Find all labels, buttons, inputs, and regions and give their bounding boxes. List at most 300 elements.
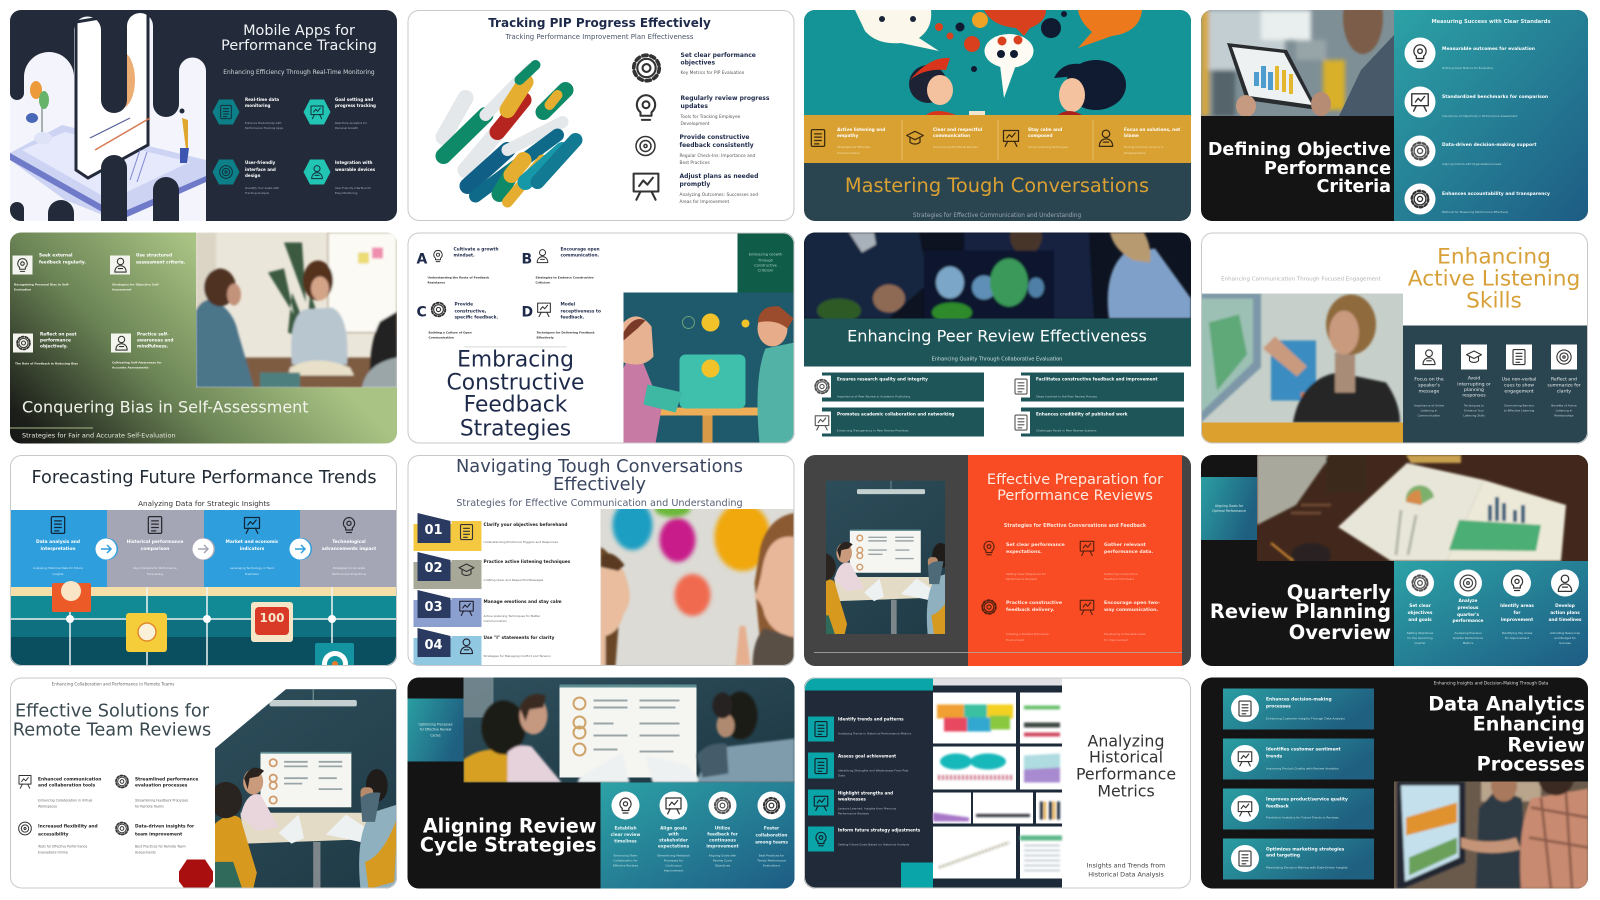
item 02: Practice active listening techniques [484, 559, 571, 565]
item: establish timelines: Effective Reviews [613, 864, 639, 868]
subtitle: Enhancing Efficiency Through Real-Time Monitoring [223, 70, 375, 76]
title: Remote Team Reviews [13, 720, 211, 740]
item: standardized benchmarks: Importance of Objectivity in Performance Assessment [1442, 114, 1518, 118]
green corner box [738, 232, 794, 292]
item: utilize feedback: improvement [706, 844, 739, 850]
title: Effective Solutions for [15, 702, 210, 722]
illustration: diagonal capsule stripes [444, 65, 576, 202]
dark left panel [804, 678, 933, 888]
item: integration with wearable devices [304, 160, 376, 195]
item: research quality: Ensures research quality and integrity [837, 376, 928, 382]
slide: Mastering Tough Conversations [804, 10, 1191, 221]
photo: team around a world map monitor [804, 218, 1191, 322]
item C [416, 302, 498, 340]
item: highlight strengths [808, 790, 897, 816]
item B: B [522, 252, 532, 268]
item: data-driven decision-making [1404, 136, 1537, 166]
item: product quality: feedback [1266, 804, 1289, 810]
slide: Data Analytics Enhancing Review Processes [1201, 678, 1588, 888]
title: Embracing [457, 348, 574, 372]
item: practice constructive feedback delivery: Creating a Positive Discussion [1006, 632, 1050, 636]
item: develop action plans: and timelines [1549, 617, 1582, 623]
item: identify areas for improvement [1500, 570, 1534, 640]
item: integration with wearable devices: Easy Monitoring [335, 191, 358, 195]
item: adjust plans as needed promptly [634, 173, 758, 205]
item: stay calm and composed: Stay calm and [1028, 127, 1062, 133]
item: user-friendly interface and design: Quantify Your Goals with [245, 186, 280, 190]
item: analyze previous performance: performance [1453, 618, 1484, 624]
subtitle: Strategies for Effective Conversations and Feedback [1004, 523, 1147, 529]
item: real-time data monitoring: Real-time data [245, 97, 279, 102]
item: stay calm and composed: composed [1028, 133, 1053, 139]
item: enhanced communication: Workspaces [38, 804, 57, 808]
photo: meeting room in angled frame [179, 689, 470, 889]
item: analyze previous performance [1453, 570, 1484, 645]
item 01: Understanding Emotional Triggers and Responses [484, 540, 558, 544]
item: academic collaboration [813, 408, 984, 436]
item: focus on solutions, not blame: Focus on solutions, not [1124, 127, 1180, 133]
teal panel [600, 782, 794, 888]
item: clear and respectful communication [902, 120, 983, 160]
step: technological advancements: Performance Projections [332, 572, 366, 576]
item: provide constructive feedback consistently: Best Practices [680, 160, 711, 166]
item C: constructive, [454, 308, 487, 314]
step: data analysis: Data analysis and [36, 539, 80, 545]
item: regularly review progress updates: Tools for Tracking Employee [680, 114, 741, 120]
photo: meeting around a screen [464, 678, 794, 782]
item: streamlined performance [116, 776, 198, 808]
title: Data Analytics [1428, 692, 1585, 716]
item: align goals: Continuous [665, 864, 682, 868]
item A: Understanding the Roots of Feedback [428, 276, 489, 280]
slide: Navigating Tough Conversations Effectively [408, 455, 794, 666]
panel heading: Measuring Success with Clear Standards [1431, 19, 1551, 25]
item: use structured assessment criteria [110, 252, 186, 292]
background panel [1201, 232, 1588, 444]
item: use non-verbal cues: Use non-verbal [1502, 376, 1536, 382]
green corner box: Criticism [758, 268, 774, 272]
item: practice self-awareness and mindfulness: Accurate Assessments [112, 366, 149, 370]
item: encourage open two-way communication: way communication. [1104, 607, 1158, 613]
title: Criteria [1316, 177, 1391, 197]
item: establish timelines: Enhancing Team [614, 854, 638, 858]
item: clear and respectful communication: Clear and respectful [933, 127, 983, 133]
item: focus on the speaker's message [1414, 344, 1444, 418]
item: highlight strengths: Highlight strengths and [838, 790, 893, 796]
item: identify areas for improvement: for [1514, 610, 1521, 616]
item: increased flexibility: Tools for Effective Performance [37, 844, 87, 848]
item: goal setting and progress tracking: Goal setting and [335, 97, 373, 102]
illustration: timeline with icons [10, 581, 397, 677]
item: constructive feedback: Facilitates constructive feedback and improvement [1036, 376, 1157, 382]
item: align goals: stakeholder [659, 838, 689, 844]
item: establish timelines: timelines [614, 838, 637, 844]
item B: Criticism [536, 280, 550, 284]
item: establish timelines: Collaboration for [613, 858, 638, 862]
item: measurable outcomes: Measurable outcomes for evaluation [1442, 46, 1535, 52]
step: data analysis: Analyzing Historical Data for Future [33, 566, 83, 570]
item: utilize feedback: Objectives [715, 864, 731, 868]
item: enhanced communication: and collaboration tools [38, 782, 96, 788]
step: market indicators [204, 510, 300, 587]
item: utilize feedback: Aligning Goals with [709, 854, 737, 858]
title: Mobile Apps for [243, 23, 355, 39]
item: assess goal achievement: Data [838, 774, 845, 778]
item: set clear objectives: and goals [1408, 617, 1432, 623]
item: avoid interrupting: Avoid [1468, 376, 1480, 382]
item: gather relevant performance data [1080, 541, 1153, 581]
teal side box: Optimal Performance [1212, 509, 1246, 513]
top caption: Enhancing Collaboration and Performance in Remote Teams [52, 682, 174, 686]
item: avoid interrupting: planning [1464, 387, 1484, 393]
item: set clear performance objectives: objectives [680, 60, 716, 66]
item: customer sentiment [1223, 738, 1374, 780]
item: set clear objectives: Setting Objectives [1407, 631, 1434, 635]
item: increased flexibility: accessibility [38, 832, 69, 838]
step: data analysis [10, 510, 107, 587]
item: analyze previous performance: quarter's [1457, 612, 1479, 618]
subtitle: Enhancing Communication Through Focused Engagement [1221, 276, 1382, 282]
band [804, 318, 1191, 366]
item: standardized benchmarks: Standardized benchmarks for comparison [1442, 94, 1548, 100]
item: provide constructive feedback consistently [636, 134, 756, 166]
step: historical comparison [107, 510, 204, 587]
item: product quality: Predictive Analytics for Future Trends in Reviews [1266, 816, 1339, 820]
item: use non-verbal cues [1502, 344, 1536, 412]
photo: two men at a large monitor [1394, 760, 1588, 888]
dark background [1201, 455, 1588, 666]
item: enhances decision-making: Enhancing Customer Insights Through Data Analysis [1266, 716, 1345, 720]
subtitle: Insights and Trends from [1087, 862, 1165, 870]
illustration: two people discussing with emojis [624, 292, 794, 444]
item: streamlined performance: Streamlined performance [135, 776, 198, 782]
item: real-time data monitoring [212, 97, 284, 130]
item D: Effectively [536, 336, 554, 340]
item: increased flexibility [19, 822, 98, 854]
arrow 2 [192, 538, 215, 560]
slide: Enhancing Active Listening Skills [1201, 232, 1588, 444]
item A: mindset. [454, 252, 475, 258]
item: enhanced communication [19, 776, 101, 808]
item: product quality: Improves product/service quality [1266, 796, 1348, 802]
item: stay calm and composed [998, 120, 1068, 160]
subtitle: Strategies for Effective Communication and Understanding [913, 213, 1081, 219]
step: historical comparison: Historical performance [127, 539, 183, 545]
item: reflect on past performance objectively [13, 332, 78, 366]
item: focus on solutions, not blame: Finding Common Ground in [1124, 145, 1164, 149]
item: foster collaboration: Foster [764, 826, 780, 832]
item: user-friendly interface and design: interface and [245, 167, 276, 172]
item D: Model [560, 302, 576, 308]
item: adjust plans as needed promptly: Areas for Improvement [680, 199, 729, 205]
item: seek external feedback regularly [12, 252, 86, 292]
item: accountability: Methods for Measuring Performance Effectively [1442, 210, 1509, 214]
item: marketing strategies: and targeting [1266, 852, 1300, 858]
title: Enhancing [1437, 244, 1551, 270]
item D: D [522, 304, 533, 320]
item: use structured assessment criteria: Assessment [112, 288, 132, 292]
title: Tracking PIP Progress Effectively [488, 16, 711, 30]
item 04: Use "I" statements for clarity [484, 635, 555, 641]
item: active listening and empathy: Strategies for Effective [837, 145, 870, 149]
item: establish timelines [611, 792, 640, 868]
item: constructive feedback [1012, 372, 1184, 402]
photo: meeting room [786, 481, 1013, 637]
item: active listening and empathy [811, 127, 885, 155]
item: set clear objectives: Quarter [1414, 641, 1426, 645]
item: practice constructive feedback delivery: feedback delivery. [1006, 607, 1055, 613]
item: set clear performance expectations: Set clear performance [1006, 542, 1065, 548]
item: real-time data monitoring: monitoring [245, 103, 271, 108]
item 04 [414, 628, 555, 665]
item: practice constructive feedback delivery: Environment [1006, 638, 1025, 642]
photo: women in conversation [196, 232, 397, 388]
item: align goals: expectations [658, 844, 690, 850]
item: standardized benchmarks [1404, 86, 1548, 118]
teal top bar [804, 678, 933, 690]
slide: Tracking PIP Progress Effectively [408, 10, 794, 221]
step: market indicators: Market and economic [225, 539, 279, 545]
item: avoid interrupting: Techniques to [1463, 404, 1484, 408]
title: Conquering Bias in Self-Assessment [22, 398, 309, 416]
item: foster collaboration: Timely Performance [756, 858, 786, 862]
item: integration with wearable devices: wearable devices [335, 167, 376, 172]
item: customer sentiment: Improving Product Quality with Review Analytics [1266, 766, 1339, 770]
item: enhances decision-making: processes [1266, 704, 1291, 710]
subtitle: Strategies for Effective Communication and Understanding [456, 498, 743, 509]
title: Processes [1477, 752, 1585, 776]
step: historical comparison: comparison [141, 546, 169, 552]
item: use non-verbal cues: engagement [1504, 388, 1534, 394]
item A [416, 246, 499, 284]
slide: Effective Preparation for Performance Reviews [786, 455, 1191, 666]
item: use non-verbal cues: to Effective Listening [1504, 408, 1534, 412]
step: historical comparison: Forecasting [147, 572, 163, 576]
gold strip [1201, 422, 1403, 444]
item: adjust plans as needed promptly: Analyzing Outcomes: Successes and [680, 192, 758, 198]
item: establish timelines: Establish [614, 826, 637, 832]
dark background [408, 678, 794, 888]
item: use structured assessment criteria: Strategies for Objective Self- [112, 282, 160, 286]
teal side box: for Effective Review [420, 728, 452, 732]
item: enhances decision-making [1223, 688, 1374, 730]
item: analyze previous performance: Metrics [1463, 641, 1474, 645]
item: measurable outcomes: Defining Clear Metrics for Evaluation [1442, 66, 1494, 70]
slide: Mobile Apps for Performance Tracking [10, 10, 397, 221]
slide: Analyzing Historical Performance Metrics [804, 678, 1191, 888]
item D: receptiveness to [560, 308, 601, 314]
item C: Provide [454, 302, 473, 308]
teal side box: Cycles [430, 734, 441, 738]
grey background [804, 455, 1191, 666]
green corner box: Through [757, 258, 773, 262]
red octagon [179, 860, 213, 894]
item: set clear performance objectives: Key Metrics for PIP Evaluation [680, 70, 745, 76]
item: focus on the speaker's message: Importance of Active [1414, 404, 1444, 408]
item: analyze previous performance: previous [1458, 605, 1479, 611]
item: clear and respectful communication: Overcoming Emotional Barriers [933, 145, 979, 149]
item: focus on solutions, not blame [1093, 120, 1180, 160]
item: encourage open two-way communication: for Improvement [1104, 638, 1129, 642]
step: technological advancements: advancements impact [322, 546, 376, 552]
item: data-driven decision-making: Data-driven decision-making support [1442, 142, 1537, 148]
divider line [814, 651, 1182, 654]
item: reflect and summarize: summarize for [1547, 382, 1581, 388]
item 03: Manage emotions and stay calm [484, 599, 562, 605]
item 01: 01 [424, 523, 443, 538]
slide: Enhancing Peer Review Effectiveness [804, 218, 1191, 444]
item: gather relevant performance data: Gathering Constructive [1104, 572, 1138, 576]
step: data analysis: interpretation [41, 546, 75, 552]
dark capsule mask [10, 10, 206, 221]
item: credibility: Challenges Faced in Peer Review Systems [1036, 428, 1097, 432]
item: regularly review progress updates [637, 95, 770, 127]
item: data-driven insights: Best Practices for Remote Team [135, 844, 186, 848]
step: technological advancements: Strategies for Accurate [333, 566, 365, 570]
item: user-friendly interface and design: User-friendly [245, 160, 275, 165]
item: gather relevant performance data: Feedback from Peers [1104, 577, 1135, 581]
title: Review [1507, 734, 1585, 756]
item: establish timelines: clear review [611, 832, 640, 838]
item: analyze previous performance: Analyze [1459, 598, 1478, 604]
title: Navigating Tough Conversations [456, 456, 743, 477]
item: academic collaboration: Promotes academic collaboration and networking [837, 412, 954, 416]
item: clear and respectful communication: communication [933, 133, 970, 139]
item: stay calm and composed: Active Listening Techniques [1028, 145, 1068, 149]
item: highlight strengths: Lessons Learned: Insights from Previous [838, 806, 897, 810]
photo: open report book on desk [1257, 455, 1588, 567]
background panel [408, 10, 794, 221]
item: reflect and summarize: Reflect and [1551, 376, 1577, 382]
item: seek external feedback regularly: Recognizing Personal Bias in Self- [14, 282, 70, 286]
item: real-time data monitoring: Performance Tracking Apps [245, 126, 284, 130]
item C: Communication [428, 336, 454, 340]
item: set clear performance expectations: Setting Clear Objectives for [1006, 572, 1047, 576]
item B [522, 246, 600, 284]
item: avoid interrupting: responses [1462, 392, 1486, 398]
item: foster collaboration: collaboration [756, 832, 787, 838]
item: identify areas for improvement: improvement [1501, 617, 1533, 623]
title: Cycle Strategies [420, 834, 596, 856]
item 03: 03 [424, 600, 443, 615]
item: set clear objectives: Set clear [1409, 603, 1432, 609]
item: customer sentiment: Identifies customer sentiment [1266, 746, 1341, 752]
item: streamlined performance: for Remote Teams [135, 804, 164, 808]
item: avoid interrupting: Listening Skills [1463, 414, 1485, 418]
item: assess goal achievement: Identifying Strengths and Weaknesses From Past [838, 768, 909, 772]
item: integration with wearable devices: User-Friendly Interface for [335, 186, 372, 190]
item: product quality [1223, 788, 1374, 830]
title: Analyzing [1088, 732, 1164, 750]
title: Performance Reviews [997, 488, 1153, 504]
item: utilize feedback [706, 792, 739, 868]
item: identify areas for improvement: Identifying Key Areas [1502, 631, 1533, 635]
item: highlight strengths: weaknesses [838, 796, 866, 802]
item D [522, 302, 601, 340]
item 01 [414, 513, 567, 551]
item: encourage open two-way communication: Developing Actionable Goals [1104, 632, 1146, 636]
teal side box: Aligning Goals for [1215, 504, 1244, 508]
item: integration with wearable devices: Integration with [335, 160, 373, 165]
item 03 [414, 590, 562, 627]
item: avoid interrupting: interrupting or [1457, 382, 1491, 388]
item B: Encourage open [560, 246, 600, 252]
item 02 [414, 552, 571, 589]
item: credibility [1012, 408, 1184, 436]
item D: Techniques for Delivering Feedback [536, 330, 595, 334]
photo: two girls talking with speech bubbles [600, 500, 794, 666]
item: focus on solutions, not blame: blame [1124, 133, 1139, 139]
step: data analysis: Insights [53, 572, 64, 576]
dark background [1201, 678, 1588, 888]
item: accountability: Enhances accountability and transparency [1442, 191, 1550, 197]
item: set clear objectives [1406, 570, 1434, 645]
dark background [1201, 10, 1588, 221]
item: utilize feedback: Review Cycle [713, 858, 732, 862]
item: encourage open two-way communication: Encourage open two- [1104, 600, 1160, 606]
subtitle: Analyzing Data for Strategic Insights [138, 499, 270, 508]
item: practice constructive feedback delivery [982, 600, 1062, 642]
teal corner box [901, 862, 933, 888]
item A: A [416, 252, 428, 268]
slide: Conquering Bias in Self-Assessment [10, 232, 397, 444]
item: focus on the speaker's message: speaker's [1418, 382, 1441, 388]
item: user-friendly interface and design [212, 160, 280, 195]
title: Quarterly [1287, 581, 1391, 604]
item: adjust plans as needed promptly: promptly [680, 181, 710, 188]
item: practice self-awareness and mindfulness [111, 332, 173, 370]
item: develop action plans: and Budget for [1554, 636, 1577, 640]
item: reflect and summarize: clarity [1557, 388, 1571, 394]
title: Aligning Review [423, 814, 597, 838]
item 04: 04 [424, 638, 443, 653]
gradient background [10, 232, 397, 444]
item: increased flexibility: Increased flexibility and [38, 824, 98, 830]
background panel [10, 678, 397, 888]
title: Constructive [447, 370, 584, 396]
item: seek external feedback regularly: Evaluation [14, 288, 31, 292]
item: avoid interrupting: Enhance Your [1464, 408, 1485, 412]
dark footer panel [804, 10, 1191, 221]
item C: Building a Culture of Open [428, 330, 472, 334]
item: credibility: Enhances credibility of published work [1036, 412, 1128, 416]
item: active listening and empathy: empathy [837, 133, 858, 139]
item: set clear performance objectives [634, 52, 756, 81]
item 03: Active Listening Techniques for Better [484, 614, 541, 618]
item: highlight strengths: Performance Reviews [838, 812, 870, 816]
item: utilize feedback: continuous [709, 838, 736, 844]
title: Effectively [553, 474, 646, 495]
item C: C [416, 304, 427, 320]
step: technological advancements [300, 510, 397, 587]
item: avoid interrupting [1457, 344, 1491, 418]
item: use structured assessment criteria: Use structured [136, 252, 172, 258]
item: streamlined performance: Streamlining Feedback Processes [135, 798, 189, 802]
title: Performance [1076, 764, 1176, 784]
item: enhanced communication: Enhancing Collaboration in Virtual [38, 798, 92, 802]
item: assess goal achievement [808, 752, 909, 778]
item: reflect and summarize: Listening in [1556, 408, 1573, 412]
item: goal setting and progress tracking: Personal Growth [335, 126, 358, 130]
item A: Cultivate a growth [454, 246, 499, 252]
item: foster collaboration: among teams [755, 840, 788, 846]
item: set clear performance expectations: Performance Reviews [1006, 577, 1038, 581]
step: market indicators: Leveraging Technology in Trend [230, 566, 274, 570]
item: align goals: Streamlining Feedback [657, 854, 690, 858]
subtitle: Tracking Performance Improvement Plan Effectiveness [505, 33, 694, 41]
title: Enhancing [1473, 712, 1585, 736]
item: identify trends [808, 716, 912, 742]
